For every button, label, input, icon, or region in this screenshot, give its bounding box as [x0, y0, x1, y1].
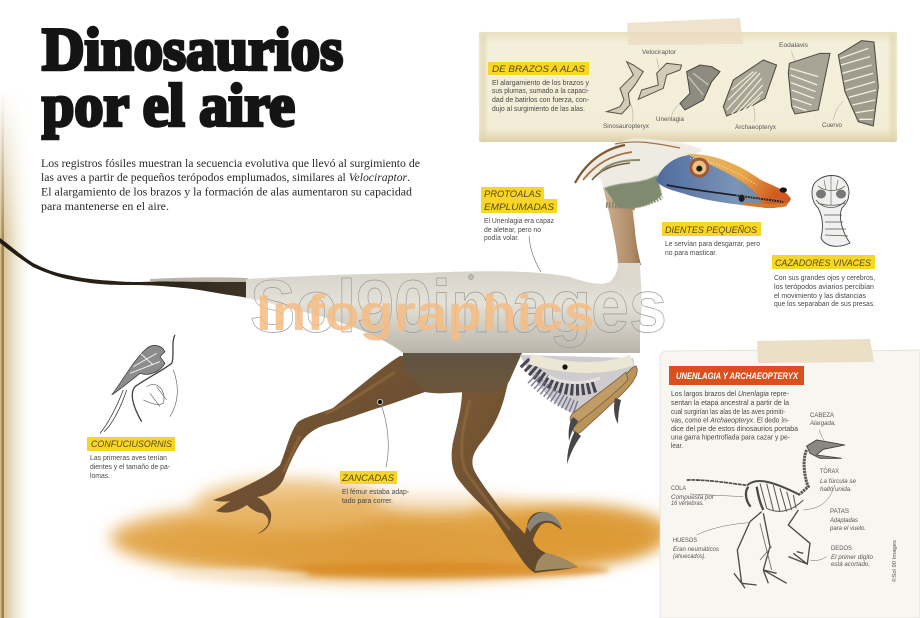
- parchment left edge: [0, 97, 26, 618]
- sketch: confuciusornis: [100, 335, 177, 433]
- text: lomas.: [90, 473, 110, 480]
- tape: [757, 339, 874, 363]
- sketch labels: [603, 42, 842, 131]
- text: de brazos a alas: dad de batirlos con fuerza, con-: [492, 97, 590, 104]
- wing feathers: [520, 355, 636, 415]
- text: [774, 275, 875, 308]
- credit: ©Sol 90 Images: [891, 540, 898, 582]
- text: el movimiento y las distancias: [774, 293, 866, 300]
- label: DIENTES PEQUEÑOS: [665, 225, 757, 235]
- sketch labels: Velociraptor: [642, 49, 677, 56]
- text: tado para correr.: [342, 498, 393, 505]
- callout: dientes pequeños: [662, 222, 761, 257]
- text: Le servían para desgarrar, pero: [665, 241, 760, 248]
- panel: unenlagia y archaeopteryx: [660, 339, 920, 618]
- sand ground: [110, 479, 670, 581]
- neck base pale: [618, 263, 640, 288]
- callout: protoalas emplumadas: [481, 187, 557, 272]
- skeleton: [687, 430, 845, 588]
- belly: [403, 353, 522, 393]
- skeleton labels: PATAS: [830, 508, 850, 515]
- skeleton labels: [671, 412, 873, 568]
- sketch labels: Unenlagia: [656, 116, 684, 123]
- hand and claws: [567, 366, 637, 464]
- skeleton labels: La fúrcula se: [820, 478, 856, 485]
- panel text: cual surgirían las alas de las aves primiti-: [671, 409, 786, 416]
- tail: [0, 238, 248, 298]
- text: los terópodos aviarios percibían: [774, 284, 874, 291]
- text: dientes y el tamaño de pa-: [90, 464, 171, 471]
- foot pad light: [535, 553, 578, 571]
- title: Dinosaurios: [42, 16, 343, 82]
- text: El Unenlagia era capaz: [484, 218, 554, 225]
- label: ZANCADAS: [341, 473, 394, 483]
- title: [42, 16, 343, 138]
- header bar: UNENLAGIA Y ARCHAEOPTERYX: [676, 371, 799, 381]
- callout: cazadores vivaces: [772, 255, 875, 308]
- body: [246, 263, 642, 353]
- tail top streak: [150, 277, 248, 282]
- sketch: velociraptor: [638, 58, 682, 99]
- sketch: cuervo: [833, 41, 878, 126]
- skeleton labels: Eran neumáticos: [673, 546, 720, 553]
- label: CONFUCIUSORNIS: [91, 439, 172, 449]
- crest feathers: [575, 138, 703, 209]
- skeleton labels: halló unida.: [820, 486, 852, 493]
- intro paragraph: para mantenerse en el aire.: [41, 201, 169, 213]
- intro paragraph: [41, 158, 420, 213]
- text: [484, 218, 554, 242]
- sketch: archaeopteryx: [723, 60, 777, 122]
- panel: de brazos a alas: [479, 18, 897, 142]
- sketch labels: Eodalavis: [779, 42, 809, 49]
- near leg: support: [450, 354, 578, 573]
- sketch: sinosauropteryx: [607, 62, 643, 122]
- text: de brazos a alas: sus plumas, sumado a la capaci-: [492, 88, 590, 95]
- watermark: infographics: Infographics: [256, 285, 595, 341]
- tape: [627, 18, 743, 45]
- title: por el aire: [42, 72, 295, 138]
- skeleton labels: CABEZA: [810, 412, 835, 419]
- sketch labels: Archaeopteryx: [735, 124, 777, 131]
- sketch: unenlagia: [672, 65, 720, 115]
- skeleton labels: 16 vértebras.: [671, 500, 704, 507]
- leader line: [381, 405, 388, 467]
- text: [90, 455, 171, 480]
- text: de brazos a alas: El alargamiento de los brazos y: [492, 80, 589, 87]
- leg highlights: [283, 372, 510, 530]
- head: [656, 154, 791, 208]
- skeleton labels: para el vuelo.: [829, 525, 866, 532]
- leader line: [529, 236, 541, 272]
- label: de brazos a alas: [488, 62, 589, 75]
- neck: [603, 175, 650, 265]
- eye: [689, 158, 709, 178]
- marker dots on body: [469, 275, 568, 370]
- text: de aletear, pero no: [484, 227, 541, 234]
- text: El fémur estaba adap-: [342, 489, 410, 496]
- panel text: sentan la etapa ancestral a partir de la: [671, 400, 789, 407]
- sketch: head front view: [812, 176, 850, 246]
- label: CAZADORES VIVACES: [775, 258, 871, 268]
- intro paragraph: Los registros fósiles muestran la secuencia evolutiva que llevó al surgimiento de: [41, 158, 420, 170]
- text: de brazos a alas: [492, 80, 590, 113]
- skeleton labels: Adaptadas: [829, 517, 859, 524]
- skeleton labels: está acortado.: [831, 561, 870, 568]
- skeleton labels: HUESOS: [673, 537, 698, 544]
- label: [481, 187, 557, 213]
- dinosaur illustration: [0, 138, 791, 573]
- sketch labels: Cuervo: [822, 122, 842, 129]
- intro paragraph: El alargamiento de los brazos y la formación de alas aumentaron su capacidad: [41, 186, 412, 198]
- text: Las primeras aves tenían: [90, 455, 167, 462]
- panel text: dice del pie de estos dinosaurios portaba: [671, 426, 798, 433]
- sketch: eodalavis: [788, 52, 830, 114]
- header bar: [669, 366, 804, 385]
- intro paragraph: las aves a partir de pequeños terópodos emplumados, similares al Velociraptor.: [41, 172, 410, 184]
- panel text: Los largos brazos del Unenlagia repre-: [671, 391, 790, 398]
- callout: confuciusornis: [87, 437, 175, 480]
- sketch labels: Sinosauropteryx: [603, 123, 650, 130]
- panel text: [671, 391, 798, 450]
- callout: zancadas: [340, 399, 410, 505]
- text: [342, 489, 410, 505]
- panel text: lear.: [671, 443, 683, 450]
- text: que los separaban de sus presas.: [774, 301, 875, 308]
- skeleton labels: DEDOS: [831, 545, 853, 552]
- label: de brazos a alas: DE BRAZOS A ALAS: [492, 64, 585, 74]
- watermark: sol90images outline: Sol90images: [250, 265, 667, 348]
- panel text: vas, como el Archaeopteryx. El dedo ín-: [671, 418, 790, 424]
- panel text: una garra hipertrofiada para cazar y pe-: [671, 434, 791, 442]
- arm sketches: [607, 41, 878, 126]
- skeleton labels: (ahuecados).: [673, 553, 706, 560]
- label: PROTOALAS: [484, 189, 541, 199]
- text: Con sus grandes ojos y cerebros,: [774, 275, 875, 282]
- text: podía volar.: [484, 235, 519, 242]
- label: EMPLUMADAS: [484, 202, 554, 212]
- marker dot: [377, 399, 383, 405]
- skeleton labels: El primer dígito: [831, 554, 873, 561]
- text: de brazos a alas: dujo al surgimiento de las alas.: [492, 106, 585, 113]
- skeleton labels: Compuesta por: [671, 494, 715, 501]
- text: no para masticar.: [665, 250, 717, 257]
- sickle claw: [527, 512, 562, 532]
- skeleton labels: TÓRAX: [820, 466, 840, 475]
- skeleton labels: COLA: [671, 485, 687, 492]
- far leg: rear stride: [213, 354, 470, 534]
- text: [665, 241, 760, 257]
- skeleton labels: Alargada.: [809, 420, 836, 427]
